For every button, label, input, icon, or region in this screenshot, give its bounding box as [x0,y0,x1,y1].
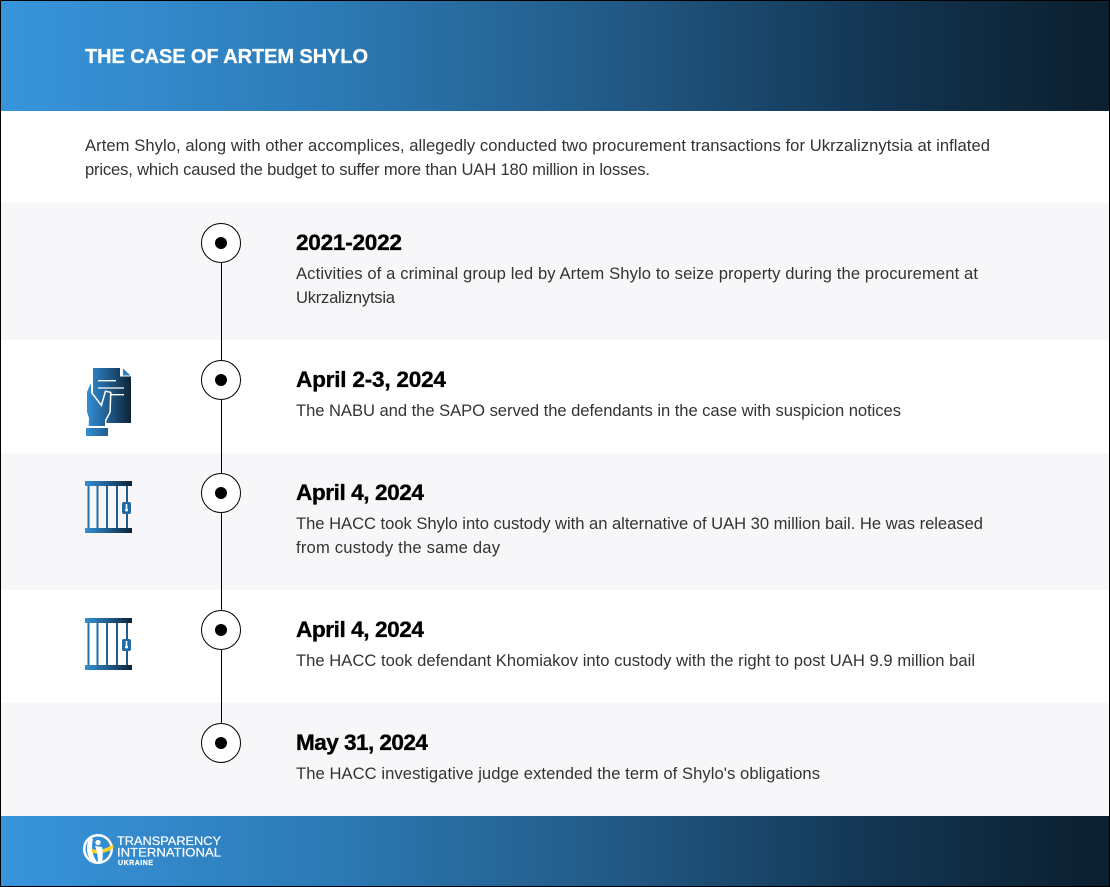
entry: 2021-2022: Ukrzaliznytsia [296,288,396,307]
timeline line [221,243,222,743]
entry: May 31, 2024 [296,730,820,783]
footer banner [0,816,1110,887]
entry: April 4, 2024 Shylo: April 4, 2024 [296,480,424,505]
marker 3 [202,474,240,512]
marker 2 [202,360,240,400]
entry: April 2-3, 2024: April 2-3, 2024 [296,367,446,392]
icon: jail bars 1 [85,481,132,533]
entry: 2021-2022: 2021-2022 [296,230,402,255]
logo text: UKRAINE [118,860,153,867]
intro text [85,136,990,179]
header banner [0,0,1110,111]
entry: May 31, 2024: The HACC investigative judge extended the term of Shylo's obligations [296,764,820,783]
band: row 5 background [0,703,1110,816]
entry: May 31, 2024: May 31, 2024 [296,730,428,755]
intro text: prices, which caused the budget to suffer more than UAH 180 million in losses. [85,160,650,179]
logo text: TRANSPARENCY [117,834,221,848]
entry: April 4, 2024 Khomiakov: April 4, 2024 [296,617,424,642]
logo: Transparency International Ukraine [83,834,221,867]
title: THE CASE OF ARTEM SHYLO [85,46,368,68]
logo mark [83,834,114,864]
entry: April 4, 2024 Shylo [296,480,983,557]
entry: April 4, 2024 Khomiakov: The HACC took defendant Khomiakov into custody with the right to post UAH 9.9 million bail [296,651,975,670]
marker 1 [202,224,240,262]
icon: jail bars 2 [85,618,132,670]
logo text: INTERNATIONAL [117,845,221,859]
entry: April 2-3, 2024: The NABU and the SAPO served the defendants in the case with suspicion notices [296,401,901,420]
icon: hand holding document [86,368,131,436]
marker 4 [202,610,240,650]
entry: April 4, 2024 Shylo: from custody the same day [296,538,501,557]
marker 5 [202,724,240,762]
entry: 2021-2022: Activities of a criminal group led by Artem Shylo to seize property during the procurement at [296,264,978,283]
entry: April 4, 2024 Shylo: The HACC took Shylo into custody with an alternative of UAH 30 million bail. He was released [296,514,983,533]
band: row 1 background [0,203,1110,340]
intro text: Artem Shylo, along with other accomplices, allegedly conducted two procurement transactions for Ukrzaliznytsia at inflated [85,136,990,155]
entry: April 4, 2024 Khomiakov [296,617,975,670]
entry: 2021-2022 [296,230,978,307]
band: row 3 background [0,453,1110,590]
entry: April 2-3, 2024 [296,367,901,420]
timeline [202,224,240,762]
logo text [117,834,221,867]
